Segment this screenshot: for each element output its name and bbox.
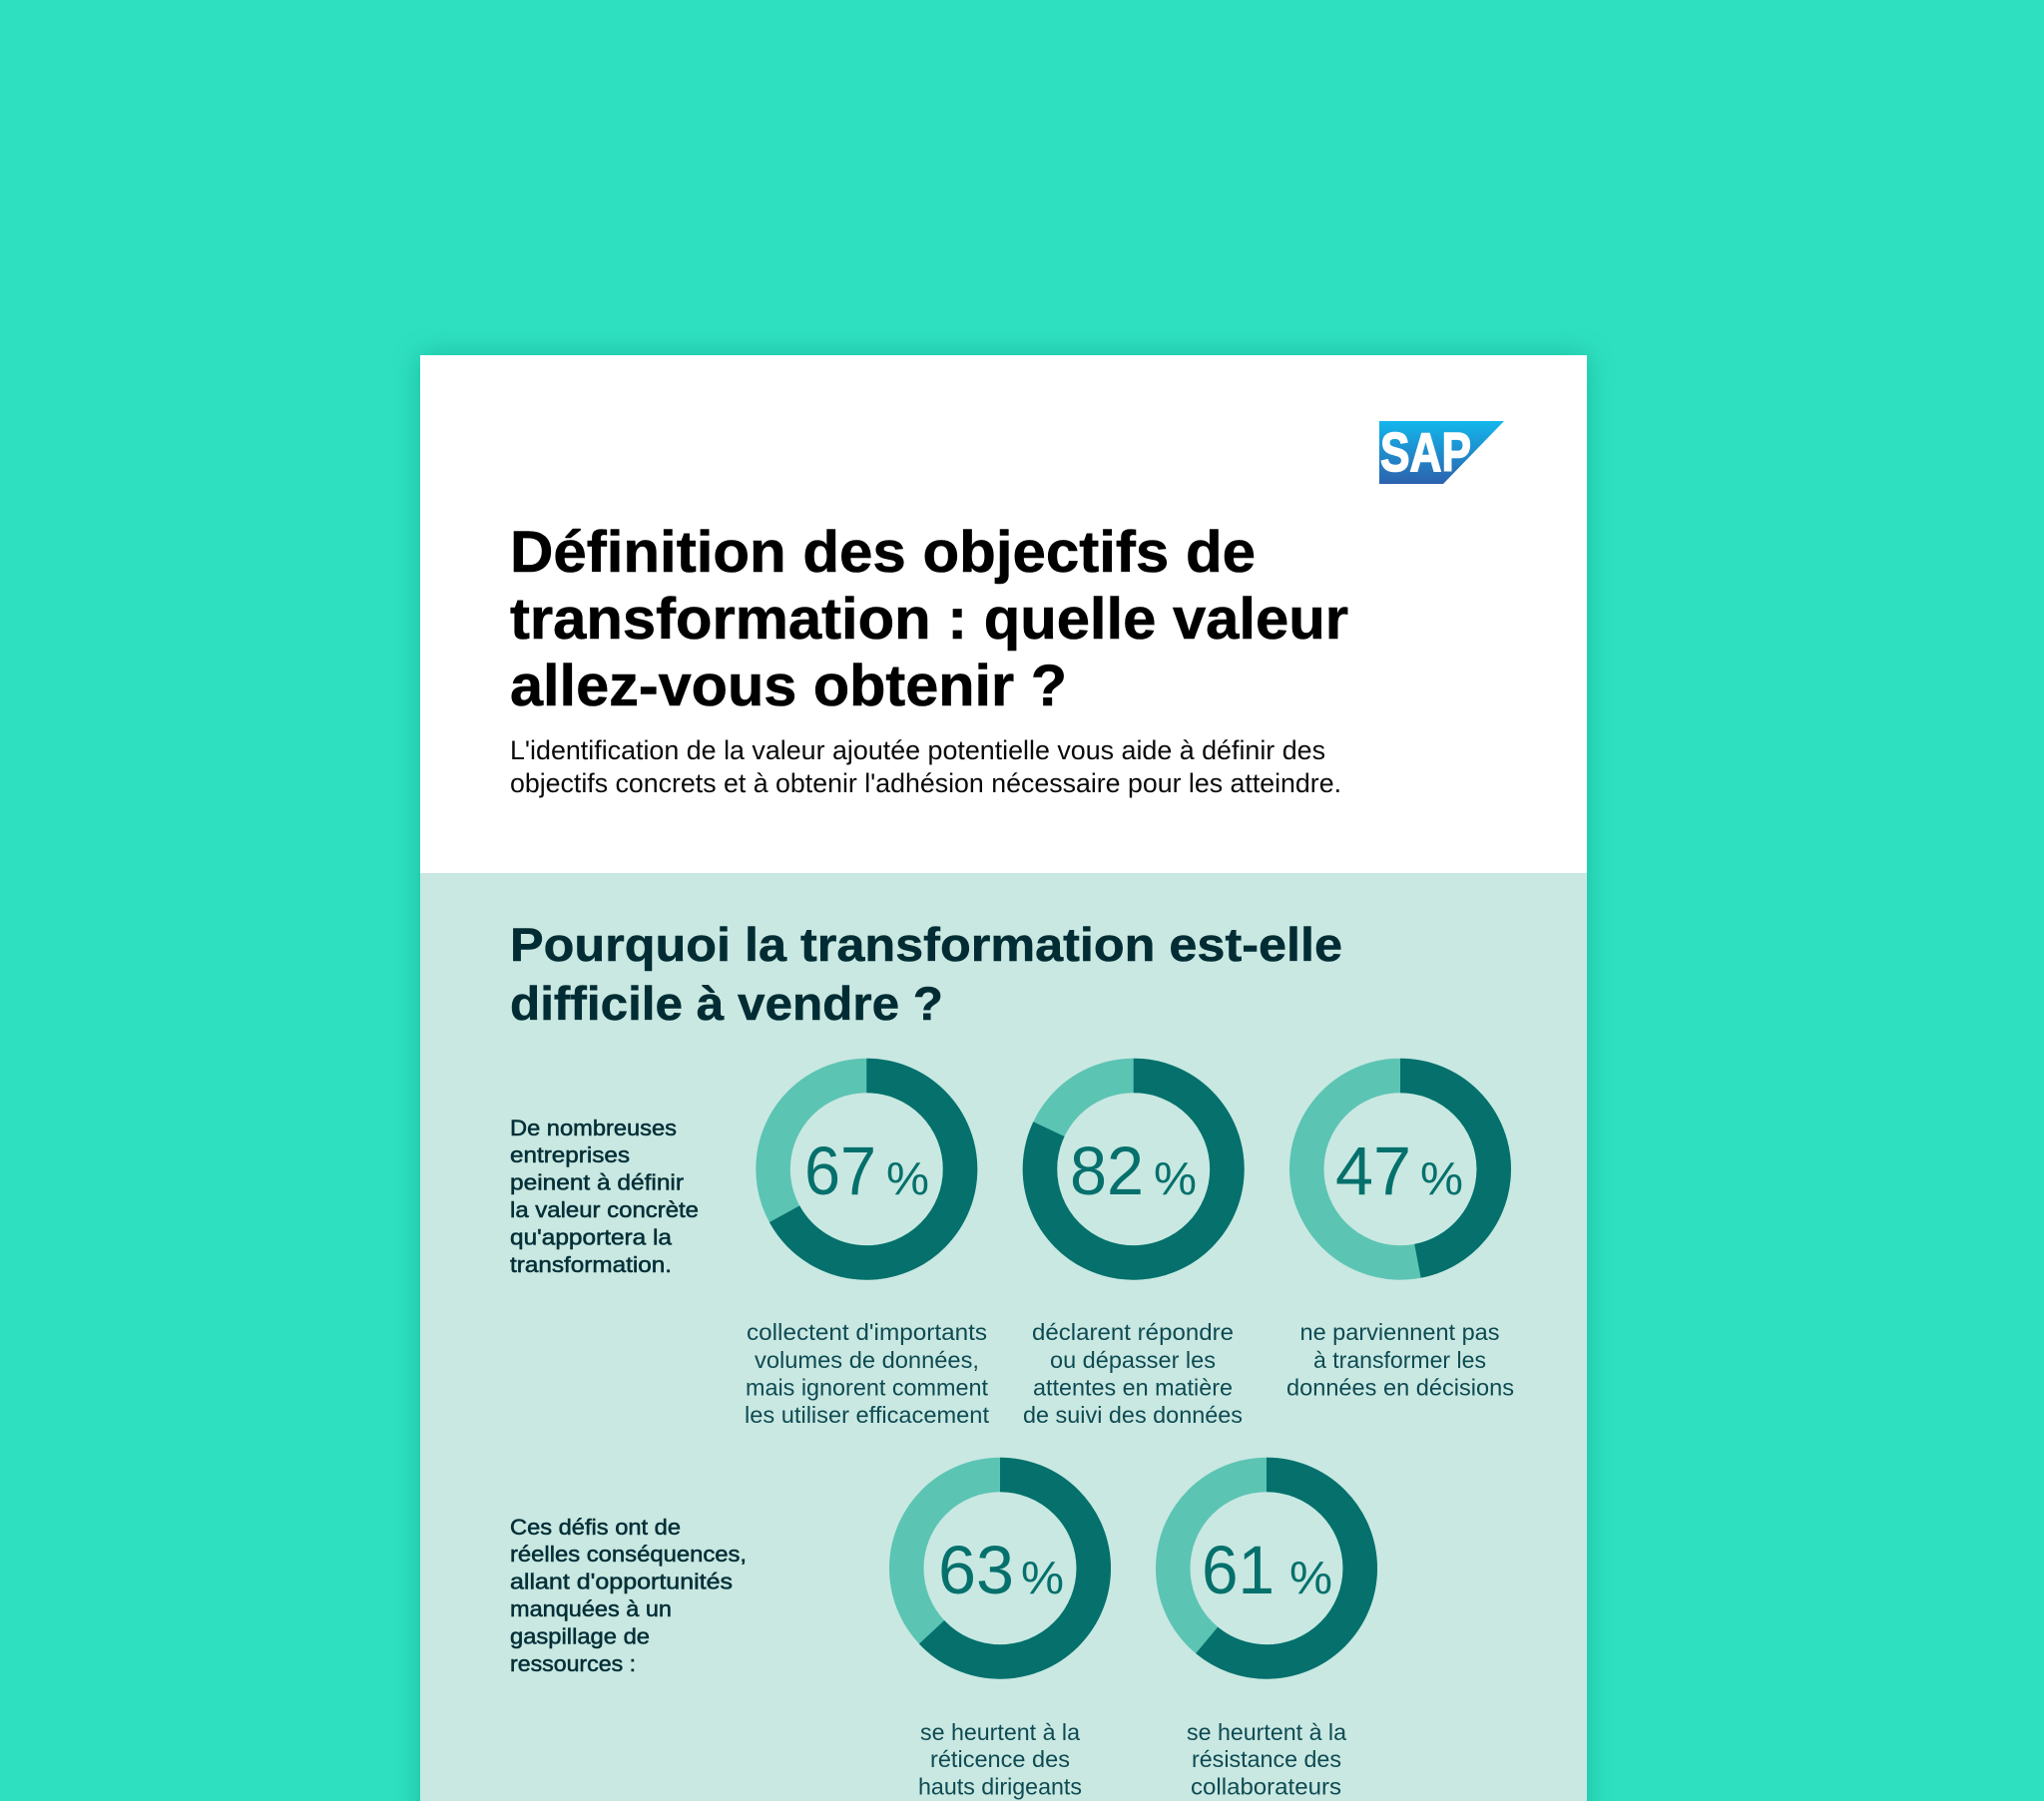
chart: donut 63%: [906, 1475, 1094, 1661]
caption: 67%: volumes de données,: [755, 1347, 979, 1373]
panel: white header card: [420, 355, 1587, 873]
caption: 47%: données en décisions: [1286, 1375, 1514, 1401]
heading: difficile à vendre ?: [510, 977, 943, 1030]
panel: why transformation is hard to sell: [420, 873, 1587, 1801]
caption: 61%: résistance des: [1192, 1746, 1341, 1772]
caption: 47%: à transformer les: [1313, 1347, 1486, 1373]
caption: 63%: réticence des: [930, 1746, 1070, 1772]
chart: donut 63%: 63: [938, 1532, 1014, 1608]
chart: donut 47%: %: [1420, 1152, 1463, 1204]
chart: donut 67%: %: [886, 1152, 929, 1204]
caption: 61%: collaborateurs: [1191, 1774, 1341, 1800]
chart: donut 82%: %: [1154, 1152, 1197, 1204]
caption: 63%: [918, 1719, 1082, 1800]
caption: 67%: mais ignorent comment: [746, 1375, 988, 1401]
icon: SAP logo: SAP: [1380, 421, 1471, 483]
caption: 82%: de suivi des données: [1023, 1402, 1243, 1428]
heading: [510, 918, 1342, 1030]
caption: 47%: ne parviennent pas: [1299, 1319, 1499, 1345]
text block: intro row 1: [510, 1116, 699, 1277]
title: allez-vous obtenir ?: [510, 654, 1067, 718]
chart: donut 61%: %: [1289, 1552, 1332, 1603]
chart: donut 61%: 61: [1202, 1532, 1275, 1608]
text block: intro row 1: entreprises: [510, 1142, 630, 1167]
text block: intro row 1: peinent à définir: [510, 1169, 685, 1195]
caption: 63%: se heurtent à la: [920, 1719, 1081, 1745]
caption: 82%: ou dépasser les: [1050, 1347, 1216, 1373]
chart: donut 47%: 47: [1335, 1132, 1411, 1209]
text block: intro row 1: transformation.: [510, 1252, 672, 1277]
subtitle: objectifs concrets et à obtenir l'adhésion nécessaire pour les atteindre.: [510, 768, 1341, 798]
text block: intro row 1: De nombreuses: [510, 1116, 677, 1140]
chart: donut 67%: 67: [804, 1132, 876, 1209]
card shadow: [420, 355, 1587, 1801]
text block: intro row 1: la valeur concrète: [510, 1197, 699, 1222]
chart: donut 82%: [1040, 1076, 1227, 1262]
chart: donut 82%: 82: [1070, 1132, 1144, 1209]
title: transformation : quelle valeur: [510, 587, 1348, 652]
caption: 82%: [1023, 1319, 1243, 1428]
caption: 61%: se heurtent à la: [1187, 1719, 1347, 1745]
subtitle: [510, 735, 1341, 798]
caption: 63%: hauts dirigeants: [918, 1774, 1082, 1800]
chart: donut 67%: [773, 1076, 960, 1262]
heading: Pourquoi la transformation est-elle: [510, 918, 1342, 971]
text block: intro row 2: Ces défis ont de: [510, 1515, 681, 1540]
caption: 82%: déclarent répondre: [1032, 1319, 1234, 1345]
text block: intro row 2: réelles conséquences,: [510, 1542, 747, 1567]
text block: intro row 2: [510, 1515, 747, 1676]
text block: intro row 2: manquées à un: [510, 1596, 672, 1621]
caption: 67%: [745, 1319, 989, 1428]
caption: 82%: attentes en matière: [1033, 1375, 1233, 1401]
text block: intro row 2: gaspillage de: [510, 1624, 650, 1648]
title: Définition des objectifs de: [510, 520, 1256, 585]
caption: 67%: les utiliser efficacement: [745, 1402, 989, 1428]
caption: 47%: [1286, 1319, 1514, 1401]
chart: donut 63%: %: [1021, 1552, 1064, 1603]
chart: donut 47%: [1306, 1076, 1494, 1262]
caption: 61%: [1187, 1719, 1347, 1800]
text block: intro row 2: ressources :: [510, 1651, 636, 1676]
chart: donut 61%: [1173, 1475, 1360, 1661]
caption: 67%: collectent d'importants: [747, 1319, 987, 1345]
title: [510, 520, 1348, 718]
text block: intro row 2: allant d'opportunités: [510, 1569, 733, 1594]
subtitle: L'identification de la valeur ajoutée potentielle vous aide à définir des: [510, 735, 1325, 765]
text block: intro row 1: qu'apportera la: [510, 1225, 673, 1249]
